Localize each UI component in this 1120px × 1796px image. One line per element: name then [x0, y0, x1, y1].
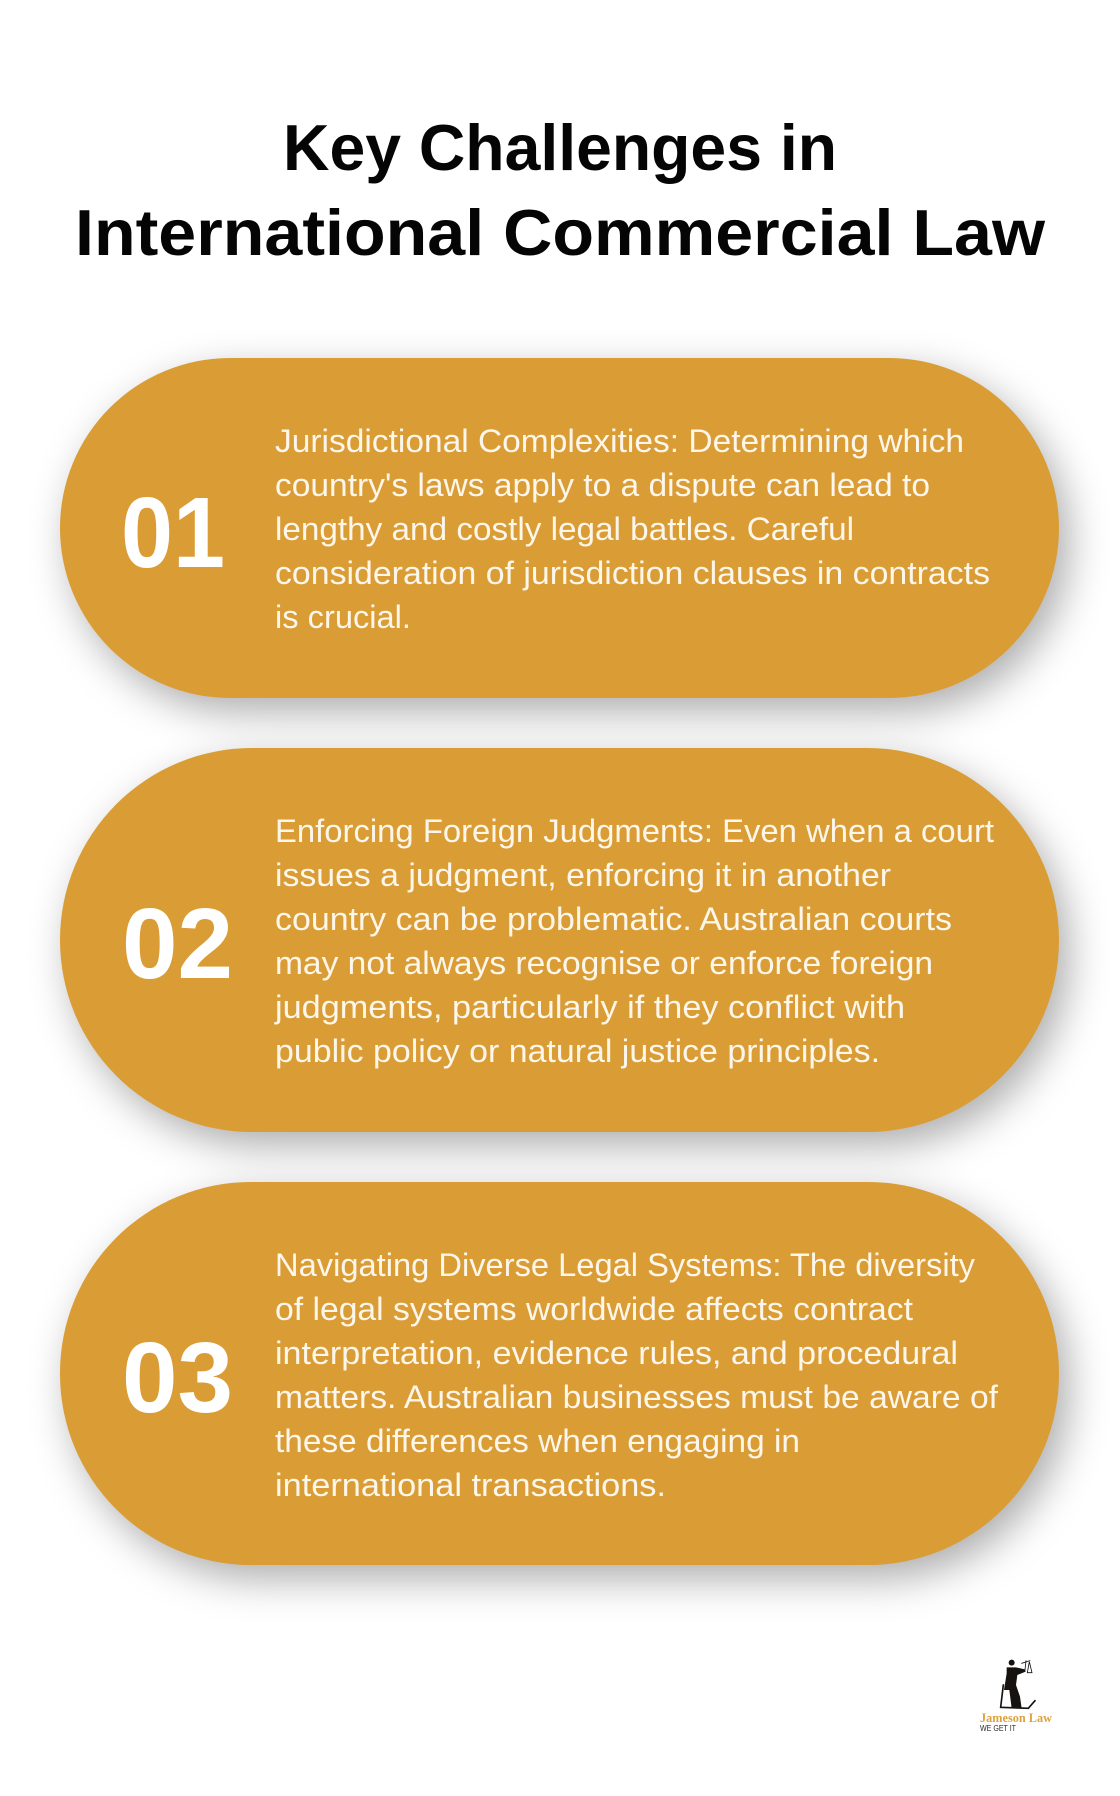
icon: lady justice	[1001, 1660, 1035, 1708]
panel: challenge 01	[60, 358, 1069, 712]
text: enforcing foreign judgments: may not always recognise or enforce foreign	[275, 945, 933, 981]
logo tagline: WE GET IT	[980, 1724, 1016, 1733]
panel: challenge 03	[60, 1182, 1069, 1579]
text: enforcing foreign judgments: issues a judgment, enforcing it in another	[275, 857, 891, 893]
text: navigating diverse legal systems: these differences when engaging in	[275, 1423, 800, 1459]
text: jurisdictional complexities: lengthy and costly legal battles. Careful	[275, 511, 854, 547]
text: enforcing foreign judgments	[274, 813, 994, 1069]
text: jurisdictional complexities: consideration of jurisdiction clauses in contracts	[275, 555, 990, 591]
text: navigating diverse legal systems: Navigating Diverse Legal Systems: The diversity	[275, 1247, 976, 1283]
text: enforcing foreign judgments: country can be problematic. Australian courts	[275, 901, 952, 937]
number 01: 01	[121, 477, 225, 589]
text: enforcing foreign judgments: public policy or natural justice principles.	[275, 1033, 880, 1069]
panel: challenge 02	[60, 748, 1069, 1146]
text: jurisdictional complexities: country's laws apply to a dispute can lead to	[275, 467, 930, 503]
text: enforcing foreign judgments: judgments, particularly if they conflict with	[274, 989, 905, 1025]
title: Key Challenges in	[283, 111, 837, 184]
logo: Jameson Law	[980, 1660, 1052, 1733]
text: navigating diverse legal systems: international transactions.	[275, 1467, 666, 1503]
text: jurisdictional complexities: Jurisdictional Complexities: Determining which	[275, 423, 964, 459]
text: enforcing foreign judgments: Enforcing Foreign Judgments: Even when a court	[275, 813, 994, 849]
title: International Commercial Law	[75, 196, 1045, 269]
text: navigating diverse legal systems	[275, 1247, 999, 1503]
text: navigating diverse legal systems: of legal systems worldwide affects contract	[275, 1291, 913, 1327]
number 02: 02	[122, 888, 233, 1000]
number 03: 03	[122, 1322, 233, 1434]
text: navigating diverse legal systems: interpretation, evidence rules, and procedural	[275, 1335, 958, 1371]
title	[75, 111, 1045, 269]
text: navigating diverse legal systems: matters. Australian businesses must be aware of	[275, 1379, 999, 1415]
text: jurisdictional complexities	[275, 423, 990, 635]
text: jurisdictional complexities: is crucial.	[275, 599, 411, 635]
logo name: Jameson Law	[980, 1711, 1052, 1725]
